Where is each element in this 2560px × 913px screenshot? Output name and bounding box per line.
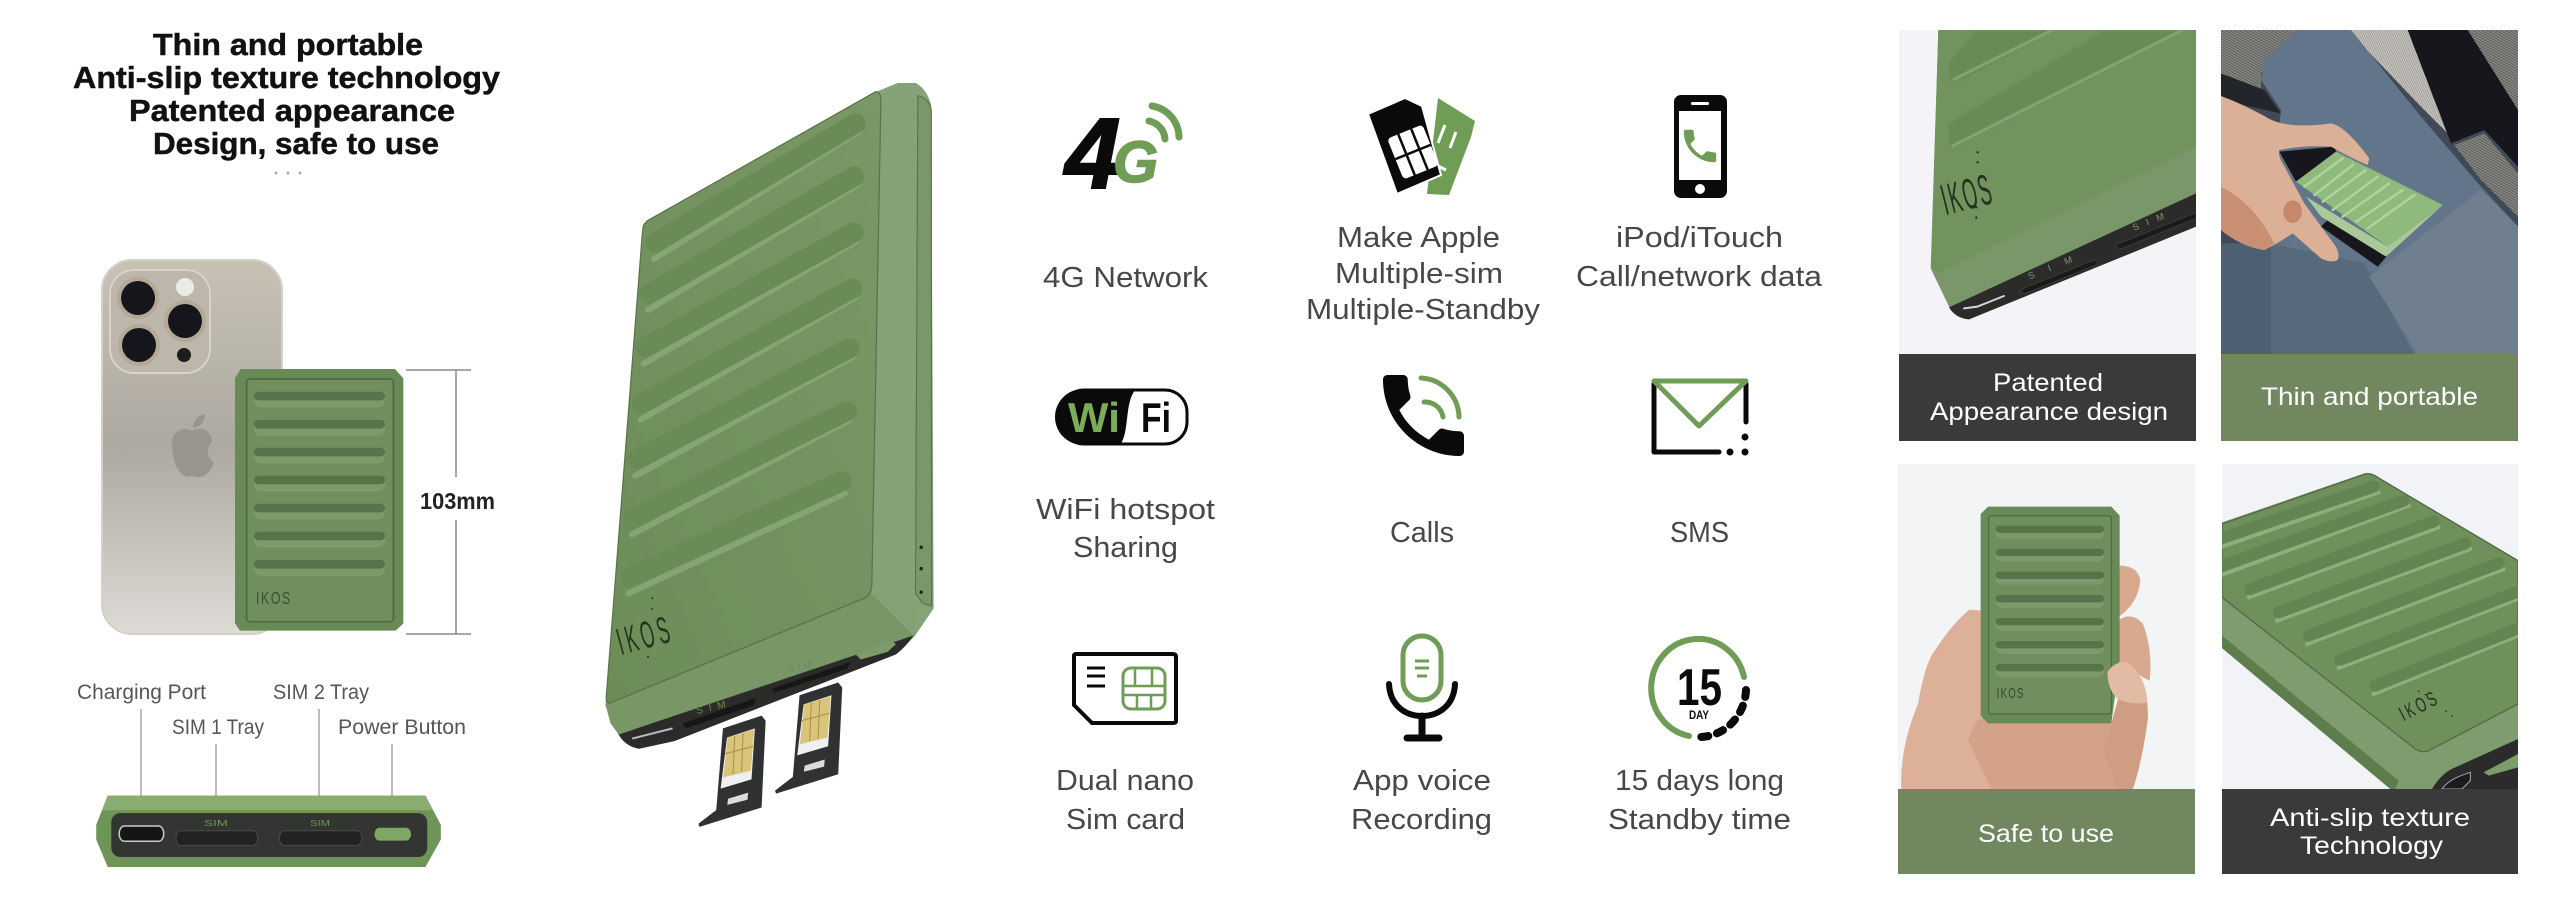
feature: multiple sim: Multiple-Standby	[1306, 294, 1541, 326]
feature: dual nano SIM	[1056, 654, 1194, 836]
feature: WiFi hotspot: Sharing	[1073, 532, 1178, 564]
ridged surface close-up	[2215, 473, 2522, 789]
small device front	[235, 369, 403, 631]
icon: WiFi badge: Fi	[1141, 394, 1171, 441]
grip ridges shadow	[630, 123, 856, 577]
panel: patented appearance design: Appearance design	[1930, 398, 2168, 426]
title: Thin and portable	[153, 27, 423, 62]
ridge highlights	[2215, 492, 2522, 694]
thumb	[2107, 662, 2147, 703]
feature: calls: Calls	[1390, 517, 1454, 549]
feature: 4G network	[1043, 98, 1209, 294]
caption	[2222, 789, 2518, 874]
feature: app voice recording: Recording	[1351, 804, 1492, 836]
height label: 103mm	[420, 488, 495, 514]
icon: WiFi badge	[1055, 389, 1187, 445]
pocketed device	[2296, 152, 2443, 247]
icon: WiFi badge: Wi	[1068, 394, 1120, 441]
icon: 15 day dial: 15	[1677, 659, 1722, 717]
feature: dual nano SIM: Sim card	[1066, 804, 1185, 836]
hand	[1901, 566, 2150, 789]
icon: 4G	[1063, 98, 1179, 210]
main device 3D view: SIM	[695, 699, 727, 717]
title: Design, safe to use	[153, 126, 439, 161]
caption	[1898, 789, 2195, 874]
feature: 15 days standby	[1608, 639, 1791, 836]
panel: patented appearance design	[1899, 30, 2196, 441]
panel logo	[2398, 690, 2453, 721]
caption	[1899, 354, 2196, 441]
feature: iPod/iTouch: iPod/iTouch	[1616, 222, 1783, 254]
port labels: Charging Port	[77, 681, 206, 704]
port labels: SIM 2 Tray	[273, 681, 369, 704]
feature: multiple sim: Make Apple	[1337, 222, 1500, 254]
device port edge view: SIM	[310, 819, 330, 828]
held device	[1981, 507, 2120, 723]
lower bevel	[605, 593, 914, 734]
height dimension	[406, 370, 471, 634]
feature: 4G network: 4G Network	[1043, 262, 1209, 294]
main device 3D view: SIM	[787, 660, 813, 676]
main device logo: IKOS	[612, 608, 678, 664]
feature: multiple sim: Multiple-sim	[1335, 258, 1503, 290]
panel logo: IKOS	[2395, 685, 2443, 726]
lifestyle photo	[2221, 30, 2518, 354]
feature: WiFi hotspot	[1036, 389, 1215, 564]
port strip	[619, 636, 913, 749]
port labels: SIM 1 Tray	[172, 716, 264, 739]
caption	[2221, 354, 2518, 441]
title	[73, 27, 501, 161]
title: Patented appearance	[129, 93, 455, 128]
device body	[605, 83, 934, 749]
feature: calls	[1383, 375, 1464, 549]
SIM tray 2	[775, 682, 842, 794]
feature: iPod/iTouch: Call/network data	[1576, 261, 1823, 293]
right rail strip	[915, 96, 932, 606]
hand holding device	[1901, 507, 2150, 789]
ridge shadows	[2215, 487, 2522, 686]
device corner close-up	[1931, 30, 2196, 319]
feature: 15 days standby: 15 days long	[1615, 765, 1784, 797]
feature: iPod/iTouch	[1576, 95, 1823, 293]
icon: microphone	[1389, 636, 1455, 738]
icon: 4G: G	[1113, 130, 1158, 195]
panel: safe to use: Safe to use	[1978, 820, 2114, 848]
icon: smartphone	[1674, 95, 1727, 198]
port labels: Power Button	[338, 716, 466, 739]
icon: 15 day dial: DAY	[1689, 708, 1709, 722]
icon: two SIM cards	[1368, 98, 1475, 195]
hand	[2221, 96, 2369, 261]
grip ridges highlight	[629, 131, 859, 593]
panel logo	[1940, 151, 1992, 219]
feature: multiple sim	[1306, 98, 1541, 326]
icon: SIM card	[1074, 654, 1176, 723]
device corner close-up: SIM	[2131, 211, 2166, 233]
apple logo	[172, 414, 214, 477]
device corner close-up: SIM	[2027, 254, 2074, 281]
speaker dots	[920, 545, 923, 594]
icon: phone handset	[1383, 375, 1464, 456]
panel logo: IKOS	[1937, 166, 1999, 225]
feature: 15 days standby: Standby time	[1608, 804, 1791, 836]
icon: envelope	[1654, 381, 1748, 456]
feature: dual nano SIM: Dual nano	[1056, 765, 1194, 797]
panel: thin and portable: Thin and portable	[2261, 383, 2478, 411]
small device logo: IKOS	[256, 589, 292, 609]
decorative dots under title	[274, 172, 302, 174]
panel: patented appearance design: Patented	[1993, 369, 2103, 397]
front face	[606, 92, 881, 703]
port labels	[77, 681, 466, 813]
panel: safe to use	[1898, 464, 2195, 874]
logo dots	[647, 597, 653, 658]
panel: anti-slip texture technology	[2215, 464, 2522, 874]
device port edge view: SIM	[204, 819, 229, 828]
SIM tray 1	[698, 716, 766, 827]
panel logo: IKOS	[1997, 685, 2025, 702]
title: Anti-slip texture technology	[73, 60, 501, 95]
icon: 15 day dial	[1651, 639, 1746, 737]
panel: thin and portable	[2221, 30, 2518, 441]
main device 3D view	[605, 83, 934, 827]
feature: SMS: SMS	[1670, 517, 1729, 549]
camera bump	[110, 270, 210, 373]
panel: anti-slip texture technology: Technology	[2300, 832, 2444, 860]
phone back view	[102, 260, 282, 634]
feature: app voice recording: App voice	[1353, 765, 1491, 797]
panel: anti-slip texture technology: Anti-slip texture	[2270, 804, 2470, 832]
feature: SMS	[1654, 381, 1748, 549]
device port edge view	[96, 796, 441, 867]
icon: 4G: 4	[1063, 98, 1121, 210]
feature: app voice recording	[1351, 636, 1492, 836]
feature: WiFi hotspot: WiFi hotspot	[1036, 494, 1215, 526]
